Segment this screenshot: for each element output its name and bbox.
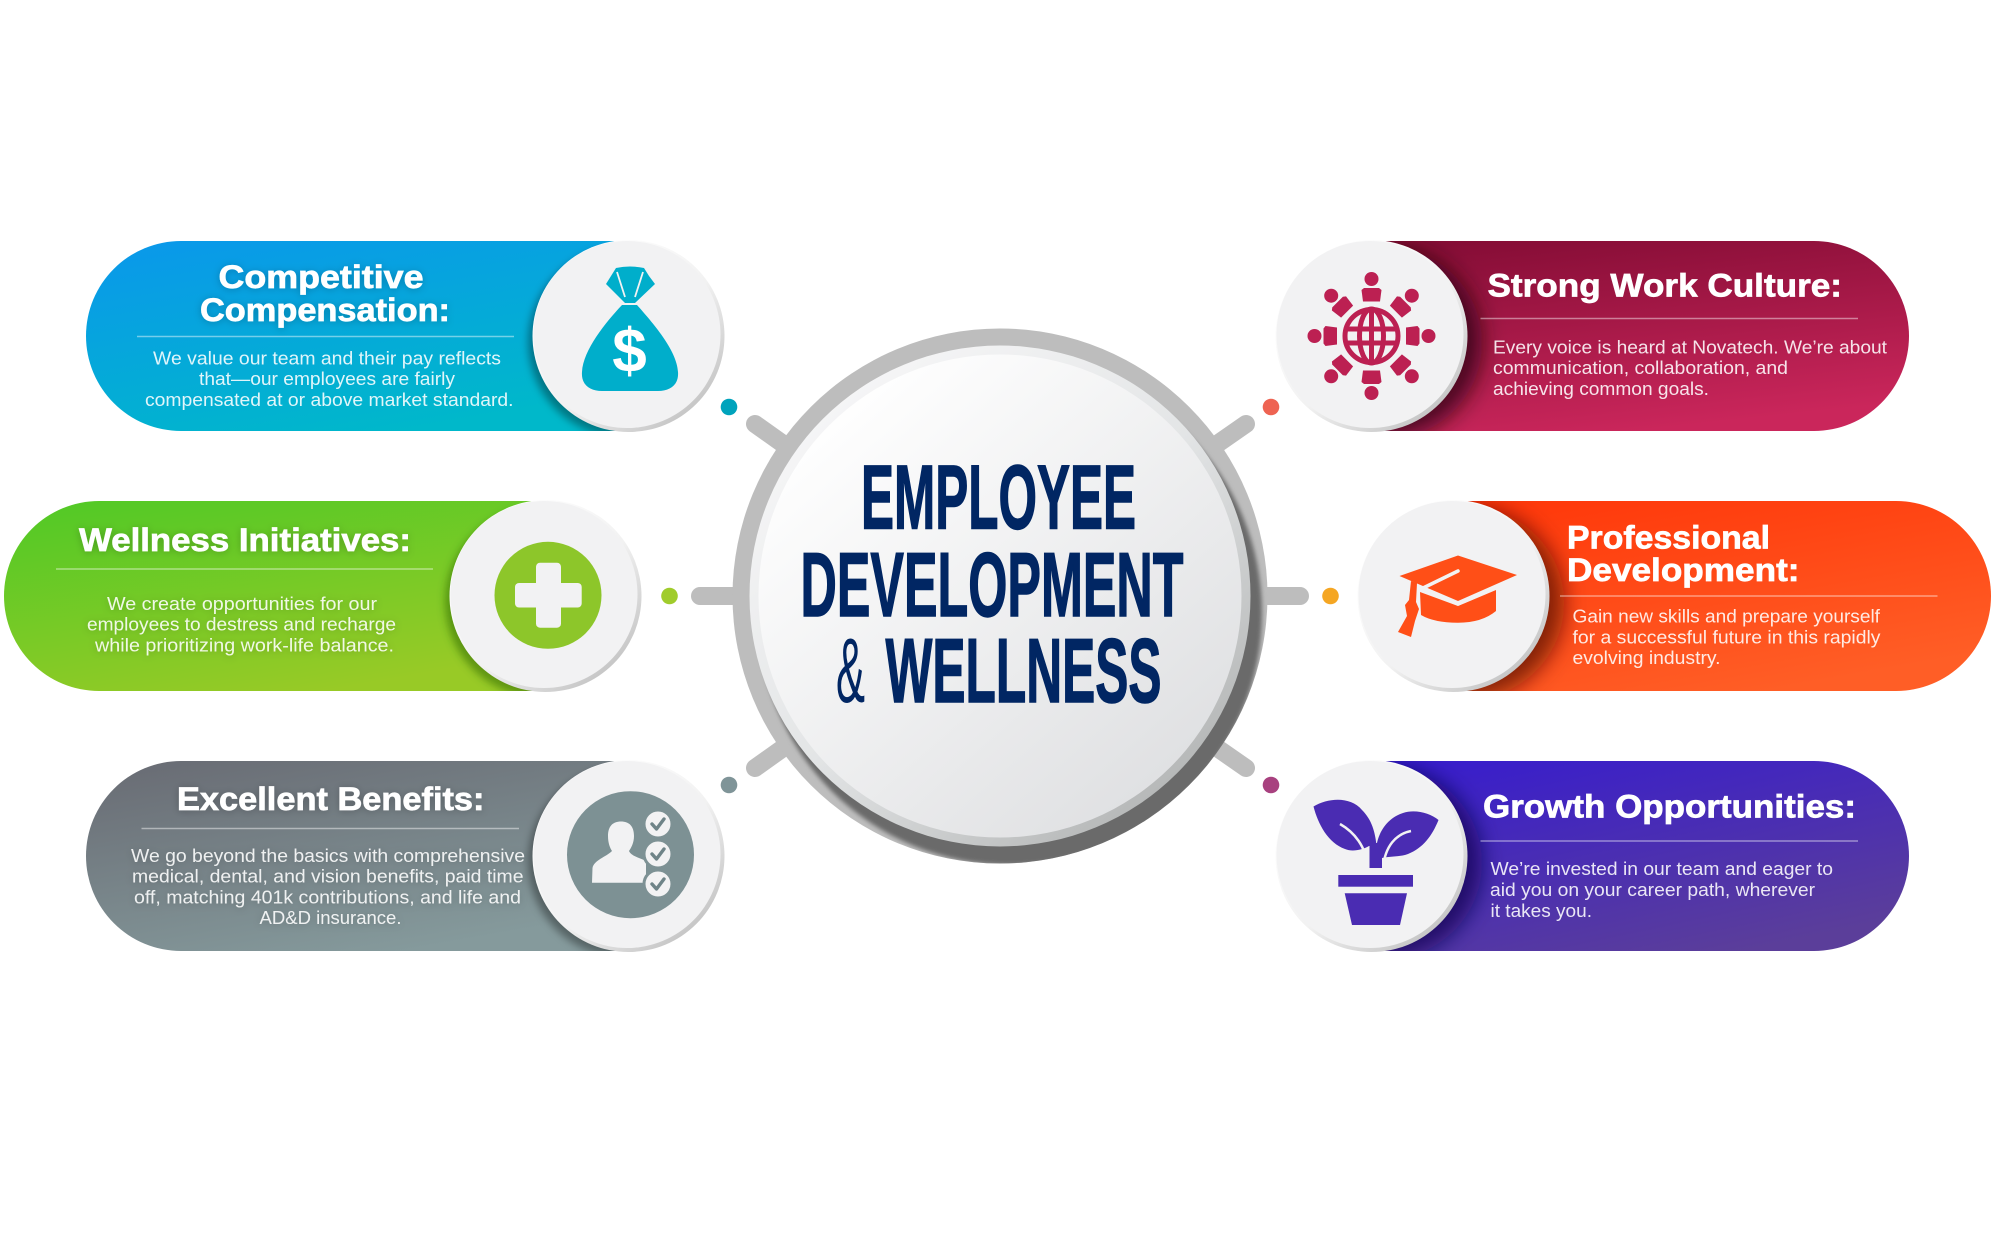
body text: growth opportunities: it takes you. — [1490, 900, 1592, 921]
body text: strong work culture: Every voice is heard at Novatech. We’re about — [1493, 336, 1887, 358]
heading: professional development: Professional — [1567, 520, 1770, 556]
title: & — [836, 620, 865, 722]
heading: excellent benefits: Excellent Benefits: — [177, 781, 485, 817]
body text: strong work culture — [1493, 336, 1887, 399]
icon: graduation cap — [1398, 556, 1517, 637]
heading: professional development — [1567, 520, 1800, 588]
panel: excellent benefits — [86, 760, 724, 957]
heading: professional development: Development: — [1567, 552, 1800, 588]
body text: competitive compensation: that—our employees are fairly — [199, 368, 456, 389]
body text: competitive compensation: compensated at or above market standard. — [145, 389, 514, 410]
body text: excellent benefits: AD&D insurance. — [260, 907, 402, 928]
panel: competitive compensation — [86, 240, 724, 437]
icon: potted plant — [1314, 800, 1438, 925]
heading: competitive compensation: Competitive — [218, 259, 424, 295]
panel: professional development — [1358, 500, 1991, 699]
icon disc: culture — [1276, 240, 1468, 432]
heading: strong work culture: Strong Work Culture: — [1488, 268, 1842, 304]
body text: excellent benefits: medical, dental, and vision benefits, paid time — [132, 866, 524, 886]
icon disc: health — [450, 500, 642, 692]
body text: excellent benefits — [131, 845, 525, 928]
heading: competitive compensation: Compensation: — [200, 292, 450, 328]
central hub circle — [732, 328, 1268, 865]
body text: wellness initiatives: employees to destress and recharge — [87, 614, 396, 634]
icon disc: money — [532, 240, 724, 432]
icon disc: benefits — [532, 760, 724, 952]
title: DEVELOPMENT — [800, 535, 1184, 636]
icon disc: growth — [1276, 760, 1468, 952]
icon: money bag: $ — [612, 317, 647, 386]
body text: wellness initiatives — [87, 593, 396, 656]
title: WELLNESS — [886, 621, 1162, 722]
body text: professional development — [1572, 606, 1881, 668]
body text: competitive compensation — [145, 348, 514, 410]
icon disc: education — [1358, 500, 1550, 692]
icon: plus in green circle — [494, 542, 602, 649]
body text: excellent benefits: We go beyond the basics with comprehensive — [131, 845, 525, 866]
body text: wellness initiatives: while prioritizing work-life balance. — [94, 634, 394, 656]
body text: growth opportunities: We’re invested in our team and eager to — [1490, 858, 1833, 879]
body text: strong work culture: communication, collaboration, and — [1493, 357, 1788, 378]
panel: growth opportunities — [1276, 760, 1909, 959]
body text: growth opportunities: aid you on your career path, wherever — [1490, 879, 1815, 900]
icon: people around a globe — [1308, 272, 1436, 400]
heading: competitive compensation — [200, 259, 450, 328]
panel: strong work culture — [1276, 240, 1909, 439]
body text: professional development: evolving industry. — [1572, 647, 1720, 668]
icon: money bag — [582, 266, 678, 391]
title: EMPLOYEE — [861, 448, 1136, 548]
connector dots — [661, 399, 1339, 793]
icon: person with checklist — [567, 791, 694, 918]
title — [800, 448, 1184, 722]
body text: competitive compensation: We value our team and their pay reflects — [153, 348, 501, 368]
heading: growth opportunities: Growth Opportunities: — [1483, 788, 1856, 824]
body text: wellness initiatives: We create opportunities for our — [107, 593, 377, 614]
heading: wellness initiatives: Wellness Initiatives: — [79, 522, 411, 558]
body text: strong work culture: achieving common goals. — [1493, 378, 1709, 399]
body text: excellent benefits: off, matching 401k contributions, and life and — [134, 886, 521, 908]
body text: professional development: Gain new skills and prepare yourself — [1572, 606, 1881, 626]
hub connector spokes — [700, 424, 1300, 768]
body text: growth opportunities — [1490, 858, 1833, 921]
panel: wellness initiatives — [4, 500, 642, 697]
body text: professional development: for a successful future in this rapidly — [1572, 626, 1881, 648]
